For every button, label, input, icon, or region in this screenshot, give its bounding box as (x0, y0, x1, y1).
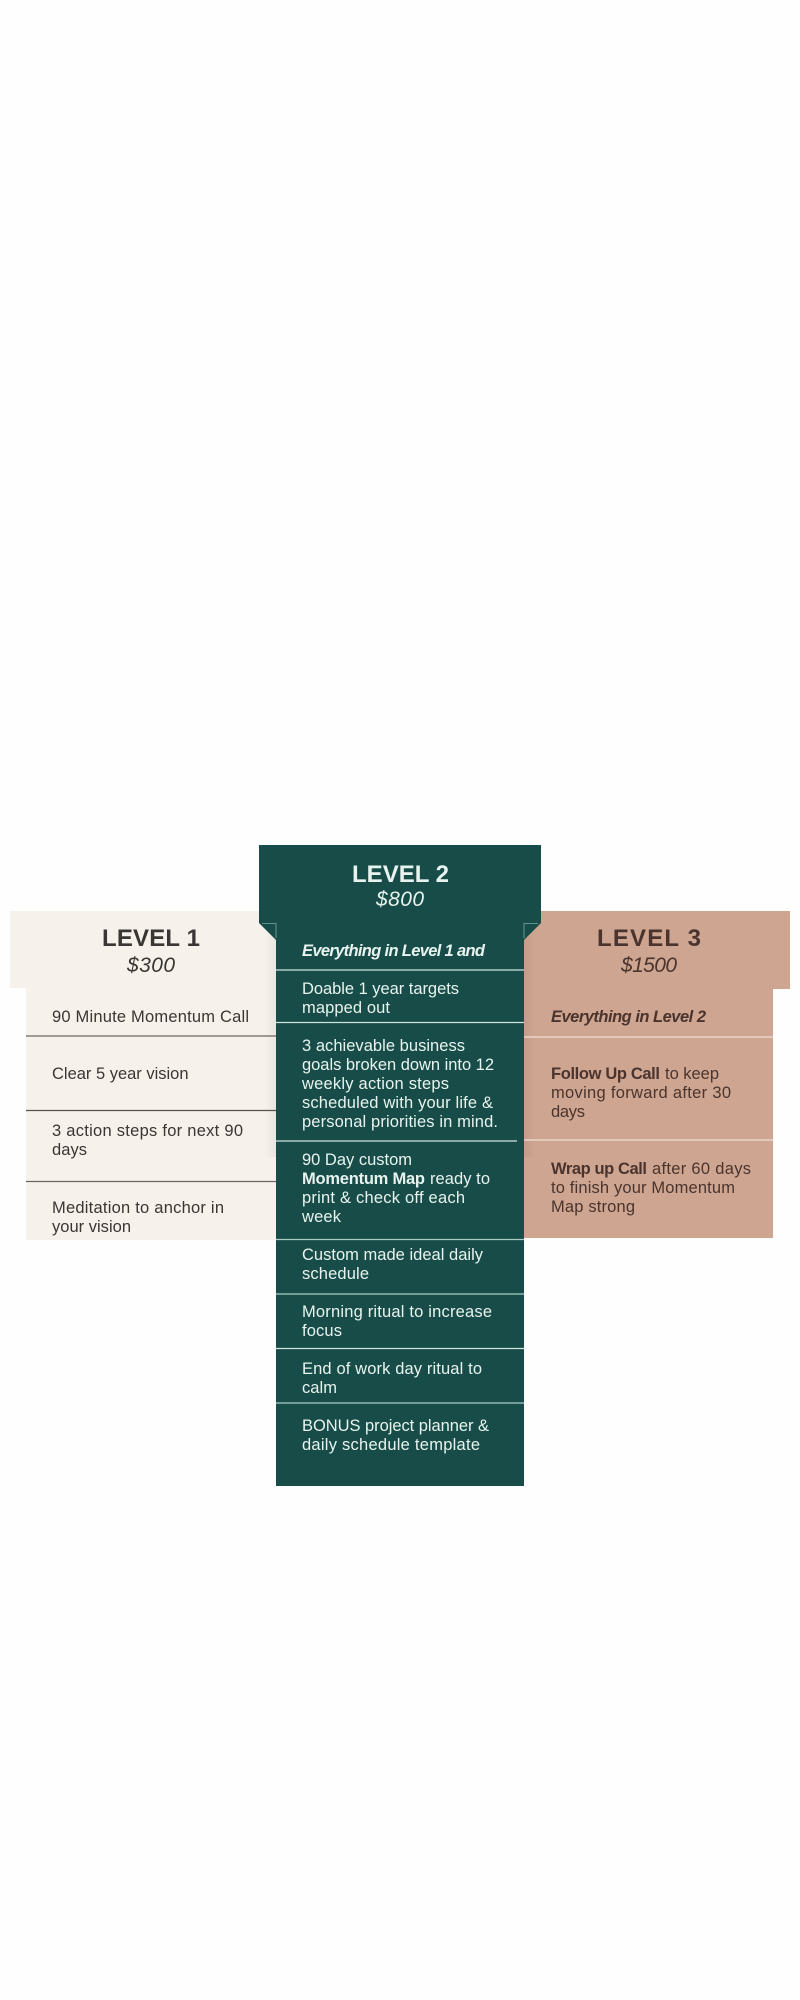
level 2 features: BONUS project planner & (302, 1417, 489, 1435)
level 1 features: your vision (52, 1218, 131, 1236)
level 3 features (551, 1008, 751, 1216)
panel: level 3 (524, 911, 790, 1238)
level 3 price: $1500 (620, 954, 677, 977)
level 2 features: Doable 1 year targets (302, 980, 459, 998)
level 3 features: to keep (665, 1065, 719, 1083)
level 1 features (52, 1008, 249, 1236)
panel: level 1 (10, 911, 276, 1240)
level 1 features: days (52, 1141, 87, 1159)
level 2 features: focus (302, 1322, 342, 1340)
panel: level 2 (259, 845, 541, 1486)
level 2 features: week (301, 1208, 342, 1226)
level 2 features: Custom made ideal daily (302, 1246, 484, 1264)
level 2 price: $800 (375, 888, 424, 911)
level 2 features: ready to (430, 1170, 490, 1188)
level 2 heading: LEVEL 2 (352, 861, 449, 888)
level 3 features: after 60 days (652, 1160, 751, 1178)
level 1 heading: LEVEL 1 (102, 925, 200, 952)
level 1 features: 3 action steps for next 90 (52, 1122, 243, 1140)
level 2 background (259, 845, 541, 1486)
level 2 features: scheduled with your life & (302, 1094, 493, 1112)
level 1 background (10, 911, 276, 1240)
level 1 features: Meditation to anchor in (52, 1199, 224, 1217)
notch outlines (262, 924, 538, 938)
level 2 features: 90 Day custom (302, 1151, 412, 1169)
level 1 price: $300 (126, 954, 175, 977)
level 2 features: goals broken down into 12 (302, 1056, 494, 1074)
level 2 features: Morning ritual to increase (302, 1303, 492, 1321)
level 1 features: 90 Minute Momentum Call (52, 1008, 249, 1026)
level 2 features: schedule (302, 1265, 369, 1283)
level 3 features: Everything in Level 2 (551, 1008, 706, 1026)
level 2 features (301, 942, 498, 1454)
level 2 features: weekly action steps (301, 1075, 449, 1093)
level 3 features: Wrap up Call (551, 1160, 647, 1178)
level 2 features: personal priorities in mind. (302, 1113, 498, 1131)
level 2 features: Everything in Level 1 and (302, 942, 486, 960)
level 2 features: print & check off each (302, 1189, 465, 1207)
level 3 features: Follow Up Call (551, 1065, 660, 1083)
level 3 features: moving forward after 30 (551, 1084, 731, 1102)
level 1 features: Clear 5 year vision (52, 1065, 188, 1083)
level 2 features: mapped out (302, 999, 390, 1017)
level 3 heading: LEVEL 3 (597, 925, 701, 952)
level 3 background (524, 911, 790, 1238)
level 2 features: Momentum Map (302, 1170, 425, 1188)
level 3 features: Map strong (551, 1198, 635, 1216)
level 3 features: to finish your Momentum (551, 1179, 735, 1197)
level 3 features: days (551, 1103, 585, 1121)
level 2 features: 3 achievable business (302, 1037, 465, 1055)
level 2 features: calm (302, 1379, 337, 1397)
level 2 features: daily schedule template (302, 1436, 480, 1454)
level 2 features: End of work day ritual to (302, 1360, 482, 1378)
